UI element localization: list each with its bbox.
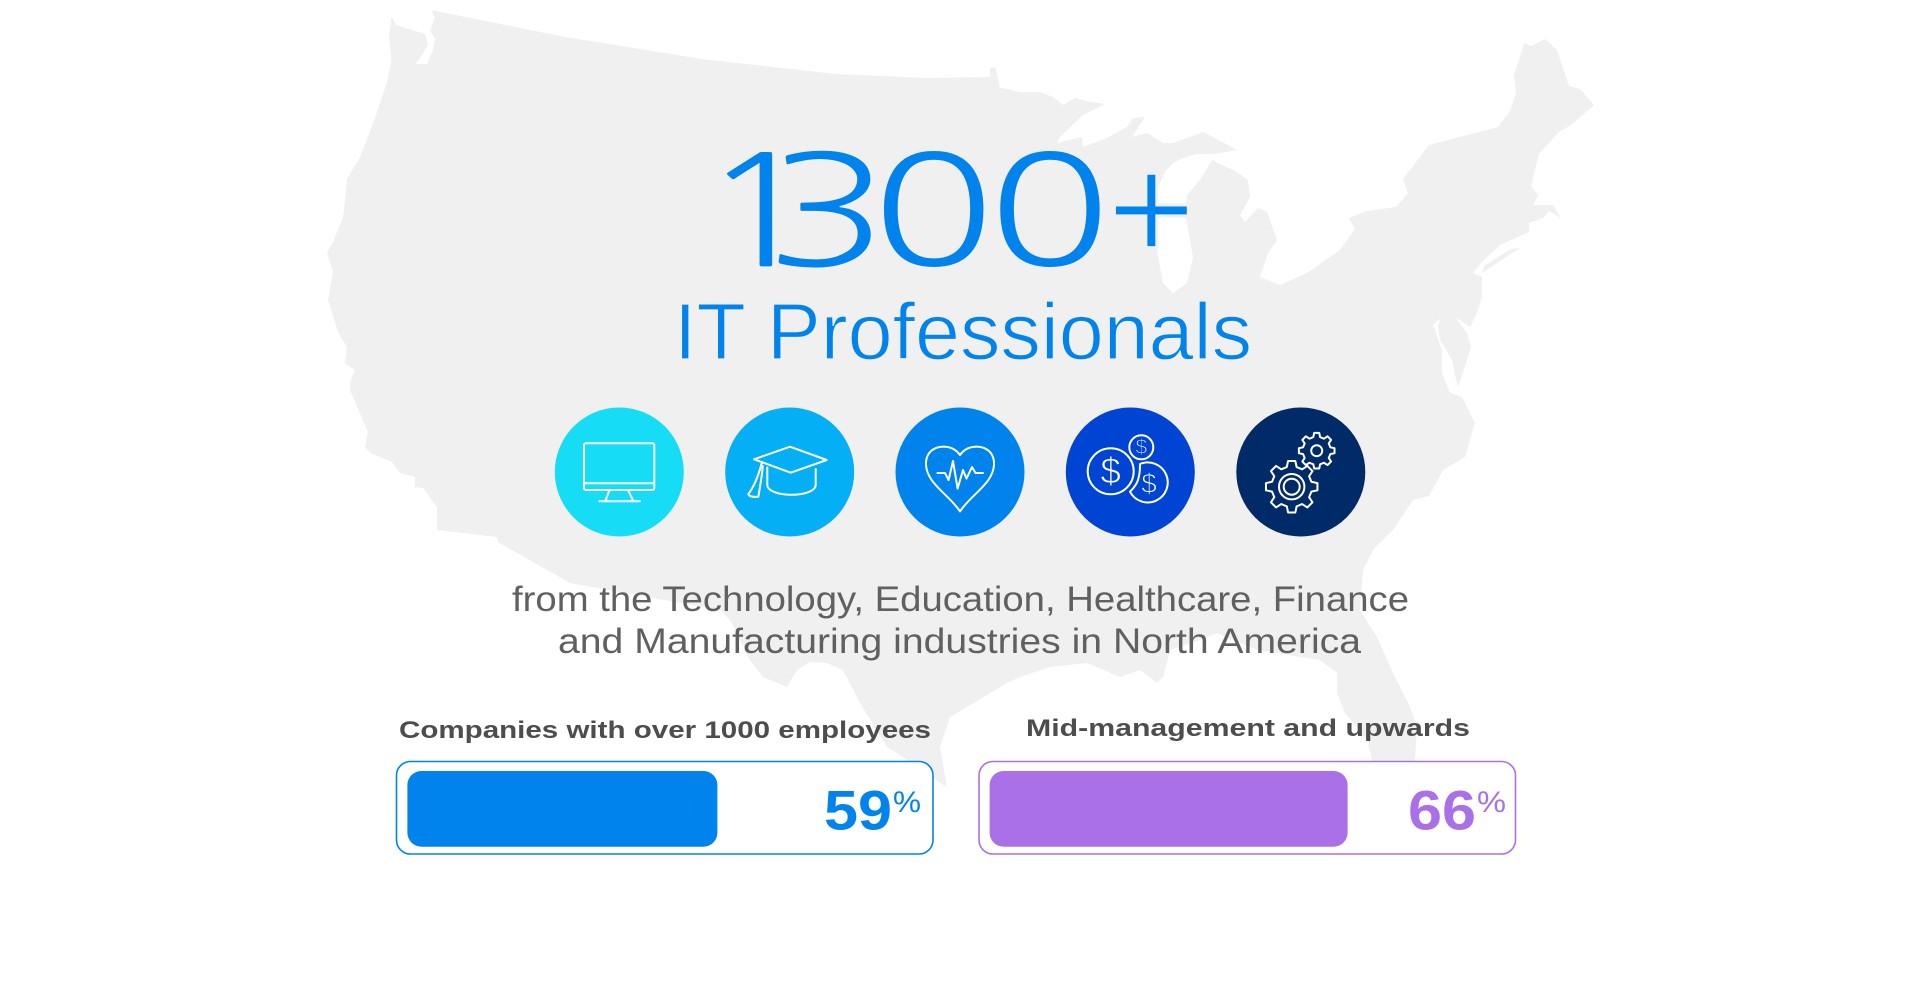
icon: manufacturing gears bbox=[1236, 408, 1365, 536]
panel: seniority stat bbox=[979, 715, 1516, 854]
icon: healthcare heart with pulse bbox=[896, 408, 1024, 536]
panel: company size stat bbox=[396, 717, 933, 854]
progress bar frame bbox=[396, 762, 933, 854]
icon: technology monitor bbox=[555, 408, 684, 536]
value 66%: 66 bbox=[1408, 778, 1476, 842]
progress bar fill 66% bbox=[990, 771, 1348, 847]
description text: and Manufacturing industries in North America bbox=[558, 622, 1362, 661]
background map of the United States bbox=[327, 10, 1594, 790]
value 59%: % bbox=[893, 786, 921, 819]
heading: companies: Companies with over 1000 employees bbox=[399, 717, 931, 744]
value 66% bbox=[1408, 778, 1506, 842]
icon: finance coins: $ bbox=[1100, 450, 1121, 492]
progress bar fill 59% bbox=[407, 771, 717, 847]
icon: finance coins bbox=[1066, 408, 1195, 536]
value 59% bbox=[824, 778, 921, 842]
description text: from the Technology, Education, Healthcare, Finance bbox=[512, 580, 1409, 619]
icon: finance coins: $ bbox=[1135, 436, 1147, 459]
icon: finance coins: $ bbox=[1141, 468, 1157, 499]
title: 1300+: + bbox=[1107, 124, 1196, 294]
heading: IT Professionals: IT Professionals bbox=[674, 287, 1252, 376]
progress bar frame bbox=[979, 762, 1516, 854]
description text bbox=[512, 580, 1409, 661]
title: 1300+: 1300 bbox=[697, 135, 1112, 289]
heading: mid-management: Mid-management and upwards bbox=[1026, 715, 1470, 742]
icon: education graduation cap bbox=[725, 408, 854, 536]
value 59%: 59 bbox=[824, 778, 892, 842]
value 66%: % bbox=[1477, 786, 1506, 819]
